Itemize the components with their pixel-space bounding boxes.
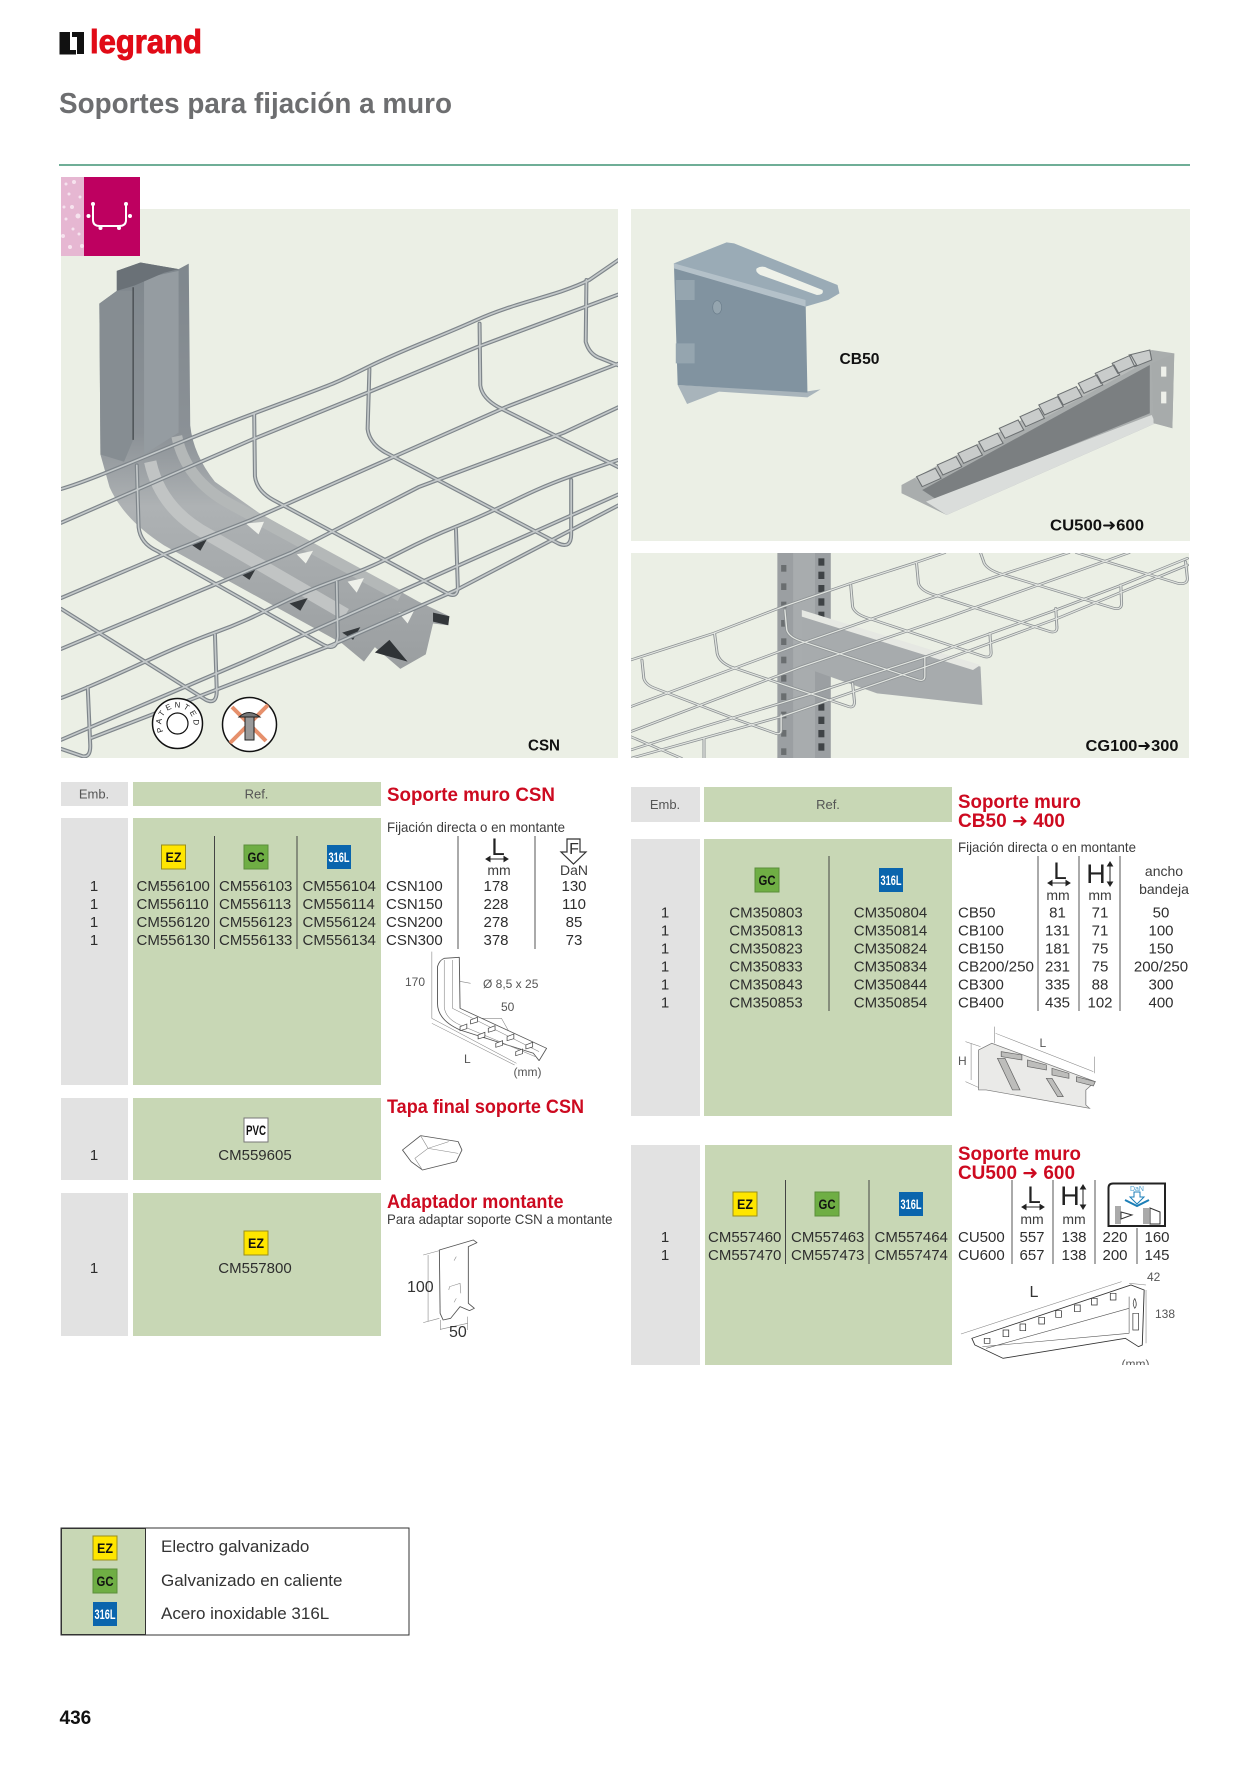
table rows: CM350843	[729, 976, 803, 994]
diagram: CSN dimensions: L	[464, 1052, 471, 1066]
icon: no screws	[222, 698, 276, 752]
title: Soportes para fijación a muro	[59, 88, 452, 120]
heading: Soporte muro	[958, 1144, 1081, 1165]
icon: height H	[1060, 1181, 1086, 1227]
table rows: CM556103	[219, 878, 292, 895]
table rows: CSN150	[386, 896, 443, 913]
icon: load capacity	[1108, 1184, 1165, 1226]
diagram: adapter: 100	[407, 1279, 434, 1296]
table rows: 131	[1045, 922, 1070, 940]
table rows: CM350844	[854, 976, 927, 994]
subheading: Para adaptar soporte CSN a montante	[387, 1211, 613, 1227]
icon: tray	[86, 202, 132, 230]
table rows: CM350834	[854, 958, 927, 976]
table: Adaptador montante	[61, 1192, 613, 1341]
table rows: 1	[90, 878, 98, 895]
badge EZ	[162, 845, 186, 869]
icon: length L	[1046, 858, 1070, 903]
table rows: CM556104	[302, 878, 376, 895]
badge 316L: 316L	[328, 849, 350, 865]
table rows: 1	[90, 914, 98, 931]
label CG100-300: CG100➜300	[1086, 738, 1179, 755]
table rows: 50	[1153, 904, 1169, 922]
table rows: CSN200	[386, 914, 443, 931]
upright and bracket	[777, 552, 982, 759]
bracket CB50	[674, 242, 839, 404]
legend: GC	[93, 1569, 342, 1593]
badge 316L: 316L	[900, 1196, 922, 1212]
diagram: end cap	[402, 1136, 462, 1170]
panel: CSN photo	[61, 209, 618, 758]
header cells	[631, 787, 952, 822]
table rows: CM350853	[729, 994, 803, 1012]
table rows: CSN300	[386, 932, 443, 949]
table rows: CM350854	[854, 994, 927, 1012]
table rows: CU500	[958, 1229, 1005, 1246]
header cells: Ref.	[245, 786, 268, 802]
column title: ancho bandeja: ancho	[1145, 863, 1183, 879]
badge EZ	[733, 1192, 757, 1216]
icon: height H: H	[1060, 1181, 1080, 1211]
table rows: CM557470	[708, 1247, 781, 1264]
table rows: 1	[661, 976, 669, 994]
table rows: CM556123	[219, 914, 292, 931]
table rows	[90, 878, 587, 949]
icon: force F: DaN	[560, 862, 588, 878]
table rows: 1	[661, 1229, 669, 1246]
page number: 436	[60, 1708, 91, 1729]
badge GC	[244, 845, 268, 869]
diagram: CSN dimensions: 50	[501, 1000, 515, 1014]
diagram: CSN dimensions: Ø 8,5 x 25	[483, 977, 539, 991]
table rows: CM350803	[729, 904, 803, 922]
table rows	[661, 1229, 1170, 1264]
legend: EZ: EZ	[97, 1540, 113, 1556]
column title: ancho bandeja	[1139, 863, 1189, 897]
legend: 316L: Acero inoxidable 316L	[161, 1604, 329, 1623]
table rows: CM556134	[302, 932, 376, 949]
heading: Adaptador montante	[387, 1192, 564, 1213]
heading	[958, 792, 1081, 832]
table rows: CM557463	[791, 1229, 864, 1246]
badge GC	[815, 1192, 839, 1216]
badge 316L: 316L	[880, 872, 902, 888]
table rows: 335	[1045, 976, 1070, 994]
table rows: 300	[1148, 976, 1174, 994]
table rows: 200/250	[1134, 958, 1188, 976]
table rows: CM350824	[854, 940, 927, 958]
table: Tapa final soporte CSN: 1	[90, 1147, 98, 1164]
table rows: CU600	[958, 1247, 1005, 1264]
table rows: 657	[1019, 1247, 1045, 1264]
bracket CSN	[99, 263, 449, 669]
icon: length L	[486, 834, 511, 878]
badge 316L	[327, 845, 351, 869]
table rows: 130	[561, 878, 587, 895]
table rows: 200	[1102, 1247, 1128, 1264]
diagram: CU dimensions: L	[1030, 1284, 1038, 1301]
table rows	[661, 904, 1188, 1012]
table rows: 378	[483, 932, 509, 949]
heading: Soporte muro CSN	[387, 785, 555, 806]
table rows: 81	[1049, 904, 1066, 922]
table rows: CB200/250	[958, 958, 1034, 976]
table rows: 150	[1148, 940, 1174, 958]
legend: GC: Galvanizado en caliente	[161, 1571, 342, 1590]
table rows: 100	[1148, 922, 1174, 940]
icon: length L	[1020, 1182, 1044, 1227]
table rows: CM556124	[302, 914, 376, 931]
table rows: 400	[1148, 994, 1174, 1012]
header cells	[61, 782, 381, 806]
cells	[61, 1193, 381, 1336]
badge GC: GC	[248, 849, 264, 865]
legend: EZ	[93, 1536, 309, 1560]
table rows: CM557474	[874, 1247, 948, 1264]
icon: height H: mm	[1062, 1211, 1086, 1227]
diagram: CB dimensions	[958, 1027, 1095, 1108]
table rows: CM350804	[854, 904, 927, 922]
table rows: 102	[1087, 994, 1113, 1012]
table: Adaptador montante: 1	[90, 1260, 98, 1277]
table rows: CB50	[958, 904, 996, 922]
table rows: CSN100	[386, 878, 443, 895]
table rows: CB300	[958, 976, 1004, 994]
cells	[61, 1098, 381, 1180]
diagram: CB dimensions: L	[1040, 1036, 1046, 1050]
table: Soporte muro CU500-600	[631, 1144, 1175, 1371]
icon: length L: L	[1027, 1182, 1041, 1209]
icon: length L: mm	[487, 862, 511, 878]
table rows: CM556120	[136, 914, 210, 931]
icon: patented	[152, 698, 204, 750]
diagram: CU dimensions	[961, 1270, 1175, 1371]
diagram: CU dimensions: (mm)	[1122, 1357, 1149, 1371]
table rows: CM350813	[729, 922, 803, 940]
legend: EZ: Electro galvanizado	[161, 1537, 309, 1556]
diagram: CB dimensions: H	[958, 1054, 967, 1068]
legend: 316L: 316L	[94, 1606, 116, 1622]
badge GC: GC	[818, 1196, 836, 1212]
table: Soporte muro CSN	[61, 782, 588, 1085]
table rows: CM557460	[708, 1229, 781, 1246]
heading	[958, 1144, 1081, 1184]
badge EZ	[244, 1231, 268, 1255]
table rows: 138	[1061, 1229, 1087, 1246]
table rows: CM556113	[219, 896, 291, 913]
logo: legrand: legrand	[90, 23, 202, 60]
panel: CB50 and CU500 photo	[631, 209, 1190, 541]
bracket CU500	[902, 350, 1174, 515]
label CB50: CB50	[840, 351, 880, 368]
table rows: CM556110	[136, 896, 209, 913]
table rows: 228	[483, 896, 509, 913]
table rows: 71	[1092, 922, 1108, 940]
icon: force F: F	[569, 841, 579, 858]
icon: length L: L	[1053, 858, 1067, 885]
table: Tapa final soporte CSN	[61, 1097, 584, 1180]
table rows: 138	[1061, 1247, 1087, 1264]
header cells: Emb.	[79, 786, 109, 802]
column title: ancho bandeja: bandeja	[1139, 881, 1189, 897]
badge EZ: EZ	[737, 1196, 753, 1212]
diagram: adapter: 50	[449, 1324, 467, 1341]
table rows: 1	[661, 958, 669, 976]
icon: load capacity: DaN	[1130, 1186, 1144, 1193]
badge EZ: EZ	[166, 849, 182, 865]
table rows: 278	[483, 914, 509, 931]
reference: CM557800	[218, 1260, 292, 1277]
heading: Soporte muro	[958, 792, 1081, 813]
badge GC: GC	[758, 872, 776, 888]
table rows: 231	[1045, 958, 1070, 976]
table rows: 557	[1019, 1229, 1045, 1246]
table rows: CM556100	[136, 878, 210, 895]
icon: height H	[1086, 859, 1112, 903]
table rows: CM556133	[219, 932, 292, 949]
icon: length L: mm	[1046, 887, 1070, 903]
icon: length L: L	[491, 834, 505, 861]
table rows: CM557473	[791, 1247, 864, 1264]
badge EZ: EZ	[248, 1235, 264, 1251]
table rows: 88	[1092, 976, 1108, 994]
badge 316L	[879, 868, 903, 892]
heading: CU500 ➜ 600	[958, 1163, 1075, 1184]
table rows: 1	[90, 932, 98, 949]
diagram: CSN dimensions: 170	[405, 975, 425, 989]
table rows: CM350823	[729, 940, 803, 958]
badge GC	[755, 868, 779, 892]
table rows: 160	[1144, 1229, 1170, 1246]
label CU500-600: CU500➜600	[1050, 518, 1144, 534]
table rows: CM557464	[874, 1229, 948, 1246]
diagram: CU dimensions: 42	[1147, 1270, 1161, 1284]
table rows: 75	[1092, 958, 1108, 976]
reference: CM559605	[218, 1147, 292, 1164]
table rows: 71	[1092, 904, 1108, 922]
diagram: CSN dimensions: (mm)	[514, 1065, 541, 1079]
diagram: adapter	[407, 1240, 477, 1341]
icon: force F	[560, 839, 588, 878]
table: Soporte muro CB50-400	[631, 787, 1189, 1116]
legend: 316L	[93, 1602, 329, 1626]
table rows: 1	[90, 896, 98, 913]
header cells: Emb.	[650, 797, 680, 812]
table rows: 73	[566, 932, 582, 949]
table rows: CB400	[958, 994, 1004, 1012]
icon: height H: H	[1086, 859, 1106, 889]
table rows: CB150	[958, 940, 1004, 958]
diagram: CU dimensions: 138	[1155, 1307, 1175, 1321]
body cells	[631, 839, 952, 1116]
table rows: CB100	[958, 922, 1004, 940]
panel: CG100 photo	[631, 552, 1189, 759]
table rows: 178	[483, 878, 509, 895]
badge PVC	[244, 1118, 268, 1142]
diagram: CSN dimensions	[405, 952, 547, 1079]
body cells	[61, 818, 381, 1085]
icon: patented: PATENTED	[156, 702, 199, 733]
table rows: CM556114	[302, 896, 375, 913]
badge 316L	[899, 1192, 923, 1216]
table rows: 85	[566, 914, 582, 931]
table rows: 1	[661, 1247, 669, 1264]
table rows: CM556130	[136, 932, 210, 949]
table rows: 181	[1045, 940, 1070, 958]
icon: length L: mm	[1020, 1211, 1044, 1227]
legend: GC: GC	[96, 1573, 114, 1589]
cells	[631, 1145, 952, 1365]
table rows: 1	[661, 904, 669, 922]
subheading: Fijación directa o en montante	[958, 839, 1136, 855]
table rows: 220	[1102, 1229, 1128, 1246]
table rows: 75	[1092, 940, 1108, 958]
table rows: 435	[1045, 994, 1070, 1012]
label CSN: CSN	[528, 738, 560, 754]
table rows: CM350833	[729, 958, 803, 976]
header cells: Ref.	[816, 797, 840, 812]
table rows: 1	[661, 994, 669, 1012]
table rows: 1	[661, 922, 669, 940]
badge PVC: PVC	[246, 1122, 266, 1138]
table rows: 1	[661, 940, 669, 958]
heading: CB50 ➜ 400	[958, 811, 1065, 832]
category tab	[61, 177, 140, 256]
table rows: CM350814	[854, 922, 927, 940]
icon: height H: mm	[1088, 887, 1112, 903]
subheading: Fijación directa o en montante	[387, 819, 565, 835]
table rows: 110	[562, 896, 586, 913]
heading: Tapa final soporte CSN	[387, 1097, 584, 1118]
table rows: 145	[1144, 1247, 1170, 1264]
legend	[61, 1528, 409, 1635]
